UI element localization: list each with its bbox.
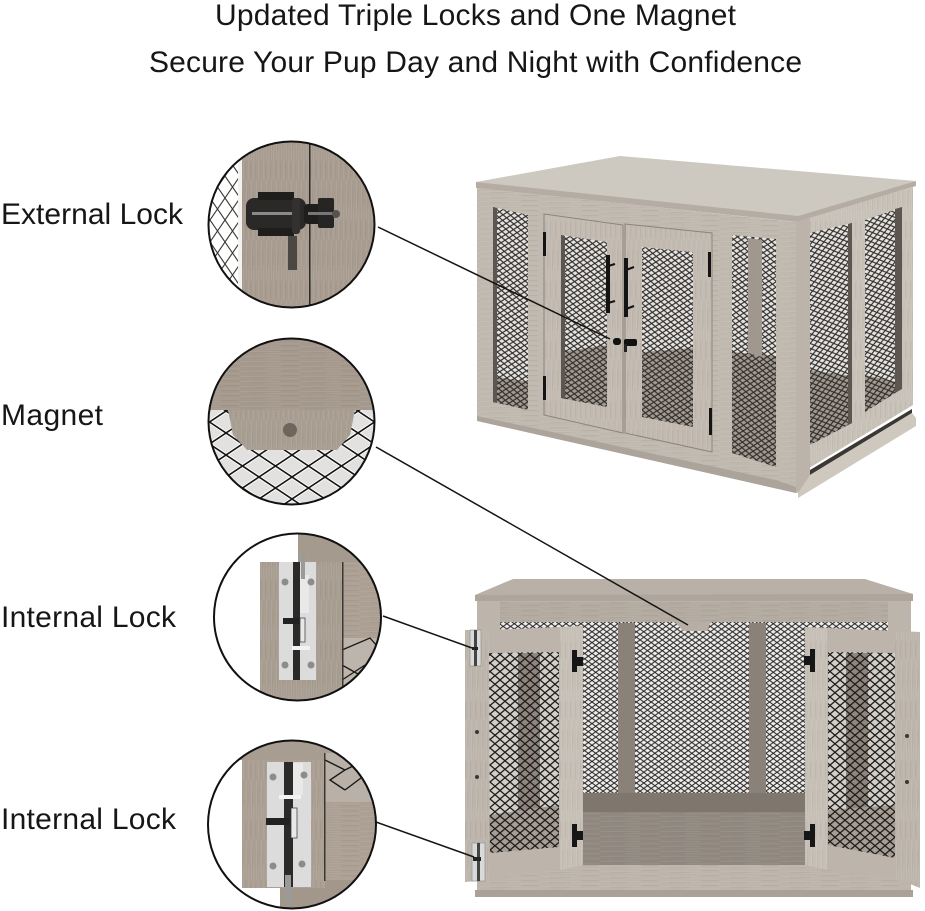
silver bolt plate bbox=[267, 762, 311, 887]
right window with rear post bbox=[732, 235, 776, 467]
external lock on doors bbox=[613, 338, 637, 352]
leader line: external lock bbox=[378, 227, 610, 339]
crate frame bbox=[477, 601, 911, 890]
magnet dot bbox=[283, 423, 297, 437]
label: internal lock upper: Internal Lock bbox=[1, 601, 177, 634]
label: internal lock lower: Internal Lock bbox=[1, 803, 177, 836]
label: magnet: Magnet bbox=[1, 399, 104, 432]
front rail bbox=[477, 865, 911, 890]
crate front bottom rail bbox=[477, 416, 796, 493]
side window rear bbox=[865, 207, 902, 412]
crate side face bbox=[796, 187, 913, 476]
title: Secure Your Pup Day and Night with Confidence bbox=[149, 46, 802, 79]
door left bbox=[544, 214, 623, 433]
leader line: internal lock upper bbox=[383, 616, 472, 648]
crate top surface bbox=[476, 156, 916, 222]
left window bbox=[493, 207, 528, 410]
detail circle: internal lock upper bbox=[210, 530, 388, 705]
crate: open view bbox=[465, 579, 920, 897]
label: external lock: External Lock bbox=[1, 198, 184, 231]
silver internal lock upper bbox=[470, 630, 481, 666]
crate base on the side bbox=[810, 409, 912, 475]
lock pin bbox=[288, 236, 297, 270]
wood backdrop bbox=[298, 534, 359, 562]
wood backdrop bbox=[240, 742, 334, 760]
title bbox=[149, 0, 802, 79]
leader line: internal lock lower bbox=[376, 822, 474, 857]
leader line: magnet bbox=[376, 447, 688, 625]
door hinges bbox=[543, 232, 712, 435]
left door open bbox=[465, 626, 583, 882]
detail circle: external lock bbox=[205, 138, 380, 313]
crate front face bbox=[477, 188, 796, 493]
rear board bbox=[560, 793, 820, 812]
door handles bbox=[608, 255, 634, 317]
magnet tab bbox=[675, 622, 711, 631]
crate: closed view bbox=[476, 156, 916, 498]
crate top bbox=[475, 579, 913, 601]
silver bolt plate bbox=[279, 562, 316, 680]
right door open bbox=[805, 627, 920, 888]
detail circle: internal lock lower bbox=[205, 738, 380, 911]
lock barrel bbox=[246, 198, 306, 230]
back mesh wall bbox=[500, 622, 888, 794]
rear posts bbox=[618, 623, 635, 794]
floor bbox=[560, 812, 820, 866]
magnet tab bbox=[228, 410, 355, 450]
silver internal lock lower bbox=[472, 843, 485, 881]
side window front bbox=[810, 223, 852, 445]
detail circle: magnet bbox=[205, 335, 380, 510]
door right bbox=[625, 224, 712, 452]
black door brackets bbox=[572, 649, 815, 847]
